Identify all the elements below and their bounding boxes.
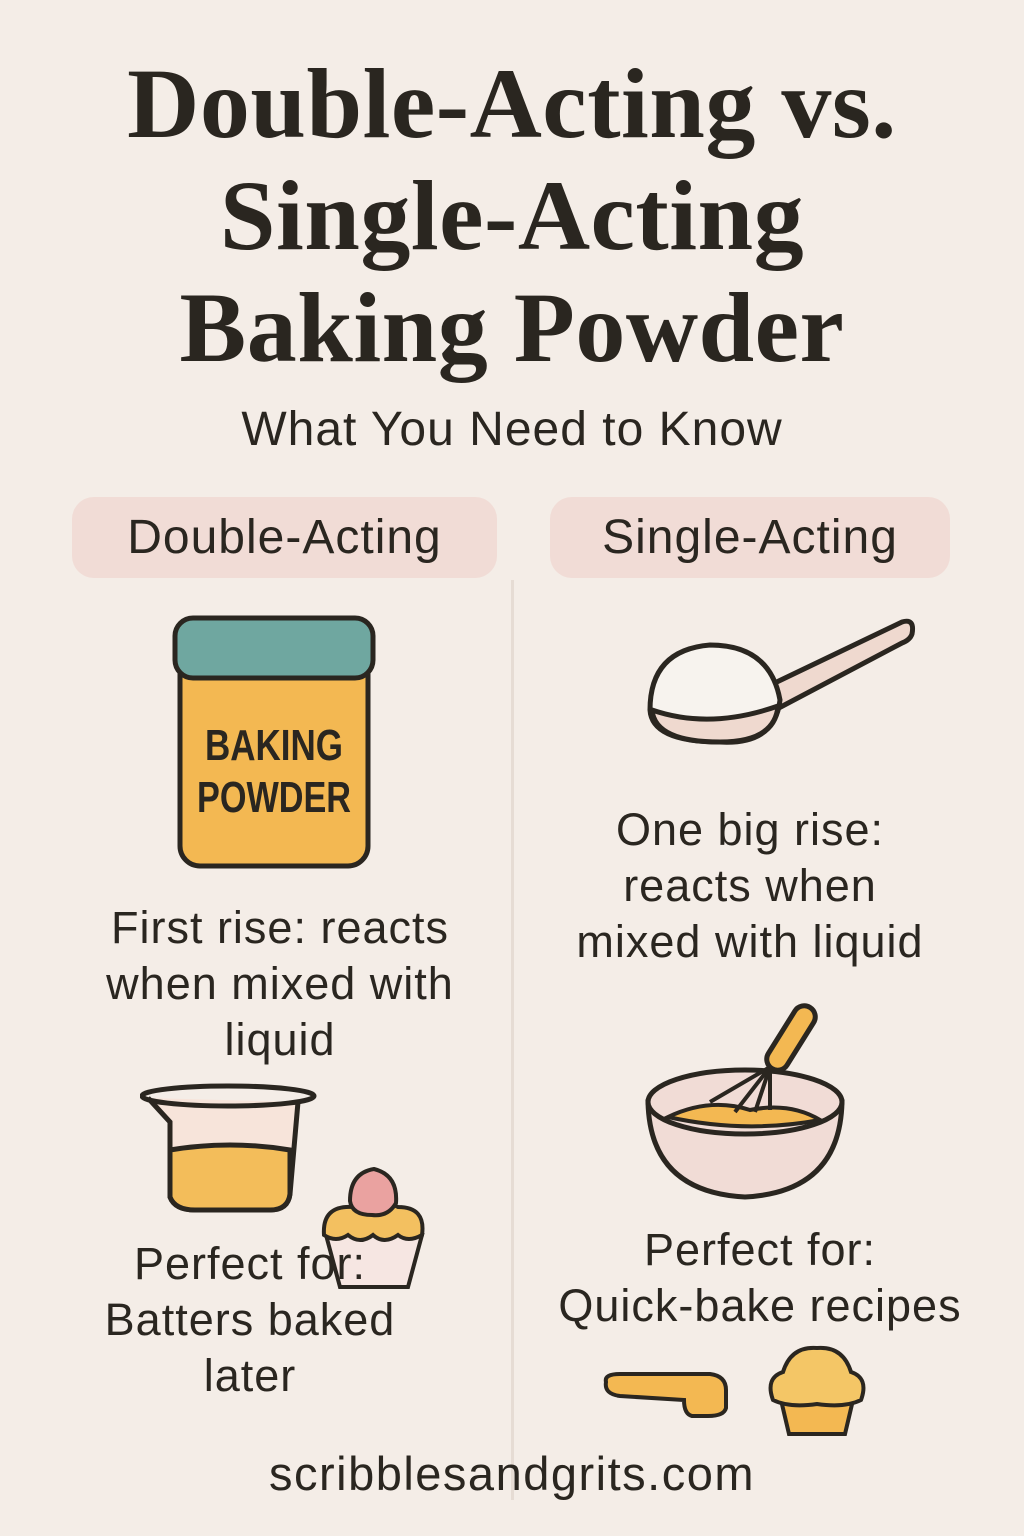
icon: measuring cup — [140, 1084, 316, 1212]
text: one big rise: mixed with liquid — [576, 916, 924, 967]
text: perfect for batters: later — [204, 1350, 296, 1401]
title — [127, 48, 897, 383]
text: first rise — [106, 902, 454, 1065]
text: one big rise — [576, 804, 924, 967]
text: first rise: liquid — [224, 1014, 336, 1065]
icon: baking powder jar — [172, 616, 376, 868]
icon: bowl with whisk — [645, 1003, 845, 1200]
text: first rise: First rise: reacts — [111, 902, 449, 953]
text: perfect for quick-bake: Perfect for: — [644, 1224, 876, 1275]
icon: muffin — [768, 1346, 866, 1436]
icon: baking powder jar: BAKING — [205, 721, 343, 770]
icon: measuring spoon — [604, 1372, 728, 1418]
subtitle: What You Need to Know — [241, 403, 783, 456]
title: Baking Powder — [180, 272, 844, 383]
text: perfect for quick-bake — [558, 1224, 962, 1331]
icon: spoon — [648, 618, 916, 745]
text: perfect for quick-bake: Quick-bake recipes — [558, 1280, 962, 1331]
title: Double-Acting vs. — [127, 48, 897, 159]
text: perfect for batters: Perfect for: — [134, 1238, 366, 1289]
pill: double-acting: Double-Acting — [127, 511, 442, 564]
pill: single-acting — [550, 497, 950, 578]
text: perfect for batters — [105, 1238, 395, 1401]
text: perfect for batters: Batters baked — [105, 1294, 395, 1345]
text: one big rise: reacts when — [623, 860, 877, 911]
text: first rise: when mixed with — [106, 958, 454, 1009]
pill: double-acting — [72, 497, 497, 578]
icon: cupcake — [322, 1167, 425, 1289]
pill: single-acting: Single-Acting — [602, 511, 898, 564]
title: Single-Acting — [220, 160, 804, 271]
footer url: scribblesandgrits.com — [269, 1447, 755, 1500]
text: one big rise: One big rise: — [616, 804, 884, 855]
